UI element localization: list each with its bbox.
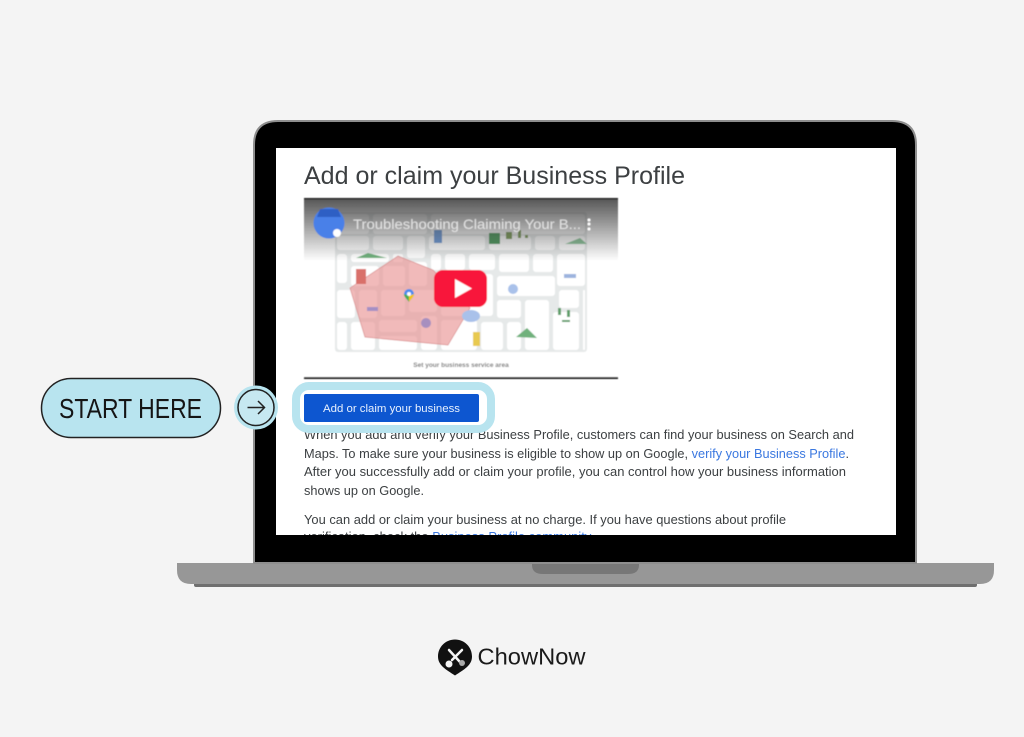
body text	[304, 427, 854, 544]
map	[335, 212, 587, 352]
logo pin icon	[438, 640, 472, 676]
laptop screen	[276, 148, 896, 535]
laptop notch	[532, 564, 639, 574]
laptop	[177, 121, 994, 587]
video menu dots	[588, 218, 590, 230]
body text: Maps. To make sure your business is eligible to show up on Google, verify your Business Profile.	[304, 446, 849, 461]
video top rule	[304, 198, 618, 200]
video title: Troubleshooting Claiming Your B...	[353, 216, 581, 232]
laptop bezel	[254, 121, 916, 563]
play button	[434, 270, 487, 307]
video bottom rule	[304, 377, 618, 379]
arrow icon	[234, 386, 278, 430]
add or claim button: Add or claim your business	[323, 403, 461, 415]
body text: You can add or claim your business at no charge. If you have questions about profile	[304, 512, 786, 527]
body text: After you successfully add or claim your profile, you can control how your business information	[304, 464, 846, 479]
body text: When you add and verify your Business Profile, customers can find your business on Search and	[304, 427, 854, 442]
channel avatar	[314, 208, 344, 238]
top shade	[304, 199, 618, 261]
body text: verification, check the Business Profile community.	[304, 529, 594, 544]
map details	[356, 269, 366, 284]
screen content	[304, 162, 854, 544]
start here pill	[42, 378, 220, 438]
service area polygon	[350, 256, 470, 345]
video thumbnail	[304, 198, 618, 379]
add or claim button highlight	[296, 386, 491, 429]
page heading: Add or claim your Business Profile	[304, 162, 685, 190]
logo wordmark: ChowNow	[478, 644, 586, 670]
body text: shows up on Google.	[304, 483, 424, 498]
laptop base shadow	[194, 580, 977, 587]
start here pill: START HERE	[59, 393, 202, 424]
map pin	[404, 289, 414, 302]
video caption: Set your business service area	[413, 362, 509, 369]
chownow logo	[438, 640, 586, 676]
add or claim button	[304, 394, 479, 422]
laptop base	[177, 563, 994, 584]
